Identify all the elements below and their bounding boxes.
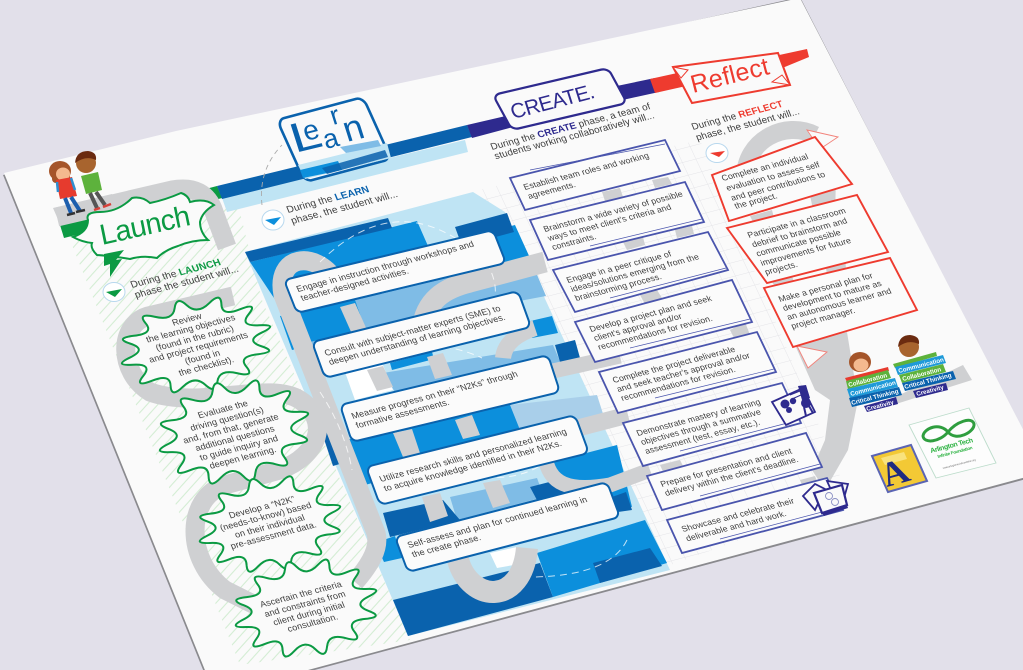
launch step: evaluate: deepen learning. [208,444,278,471]
create card 5: recommendations for revision. [619,364,737,403]
create card 3 [553,232,728,312]
logo: Arlington Tech [909,408,996,478]
launch step: ascertain: client during initial [271,600,346,627]
create card 3: brainstorming process. [573,272,663,303]
create card 6: Demonstrate mastery of learning [635,397,762,438]
phase timeline band [60,49,809,238]
reflect intro text: During the [690,110,741,133]
launch step: develop: pre-assessment data. [229,520,318,551]
icon: students with skill stacks [845,335,956,413]
create grid background [478,140,850,566]
reflect card 1 [712,137,852,221]
create card 5 [599,332,776,413]
create intro text: CREATE phase, a team of [536,101,652,141]
reflect card 2: projects. [763,259,799,277]
skill bar: critical thinking: Critical Thinking [850,388,900,407]
reflect card 1: evaluation to assess self [724,160,822,193]
launch heading badge [73,193,214,277]
learn heading badge: r [326,100,344,131]
learn card 1: Engage in instruction through workshops and [295,239,476,294]
learn card 5: the create phase. [410,533,483,559]
create card 6: objectives through a summative [639,407,763,447]
learn card 3 [340,355,560,442]
create card 4: recommendations for revision. [596,313,714,352]
launch step: evaluate: Evaluate the [196,398,249,420]
skill bar: creativity: Creativity [865,399,895,413]
learn card 1 [284,230,506,313]
launch step: review [104,283,288,407]
launch intro text: LAUNCH [177,257,223,278]
skill bar: critical thinking 2: Critical Thinking [903,372,953,391]
launch intro text: phase the student will... [133,264,241,301]
learn card 5: Self-assess and plan for continued learning in [406,494,589,550]
learn card 2: deepen understanding of learning objectives. [327,312,507,367]
create card 7: delivery within the client's deadline. [663,454,800,498]
create card 4: client's approval and/or [592,311,683,343]
create heading badge: CREATE. [508,80,598,124]
reflect card 2: improvements for future [759,235,853,268]
create card 2 [530,182,704,260]
launch step: ascertain: Ascertain the criteria [258,579,343,609]
learn card 2: Consult with subject-matter experts (SME) to [323,303,502,358]
learn card 1: teacher-designed activities. [299,266,410,303]
create card 1: agreements. [526,180,577,201]
create card 5: and seek teacher's approval and/or [615,350,752,394]
create card 6 [623,383,801,466]
launch heading badge: Launch [97,200,193,252]
launch step: review: (found in the rubric) [154,323,235,353]
icon: photos [803,481,848,516]
launch step: evaluate: and, from that, generate [181,412,280,445]
reflect card 3: development to mature as [781,278,883,313]
learn card 4: to acquire knowledge identified in their N2Ks. [382,438,563,493]
icon: certificate [772,385,815,425]
launch step: review: the learning objectives [144,312,237,345]
launch hatch background [70,205,410,665]
skill bar: communication: Communication [849,379,897,398]
panel: learn mosaic background [245,192,670,636]
launch step: develop: Develop a “N2K” [227,494,297,520]
create card 1 [510,140,680,210]
skill bar: collaboration 2: Collaboration [901,366,942,383]
reflect card 2 [727,195,888,283]
create card 2: constraints. [550,231,598,252]
skill bar: communication 2: Communication [897,356,945,375]
logo: school A: A [874,451,916,494]
launch step: evaluate [142,365,326,499]
logo: school A [872,445,927,494]
launch step: evaluate: additional questions [194,423,276,453]
learn card 5 [395,482,620,572]
reflect heading badge [673,52,790,103]
reflect card 2: Participate in a classroom [746,206,847,240]
launch step: evaluate: driving question(s) [189,405,265,433]
create card 3: Engage in a peer critique of [565,249,673,285]
learn card 4: Utilize research skills and personalized learning [378,427,568,484]
skill bar: creativity 2: Creativity [915,384,945,398]
dashed flow arcs [261,145,627,577]
icon: students at launch [49,151,118,224]
reflect intro text: phase, the student will... [694,107,801,143]
icon: launch arrow circle [103,282,125,302]
learn heading badge: e [298,113,323,147]
create card 7 [647,433,822,510]
create card 2: Brainstorm a wide variety of possible [542,189,685,234]
create heading badge [493,68,627,130]
launch step: ascertain: consultation. [286,612,340,634]
reflect card 3: an autonomous learner and [785,286,893,322]
launch step: ascertain: and constraints from [263,589,347,619]
learn heading badge: n [337,106,369,150]
create card 8: Showcase and celebrate their [680,496,796,534]
create card 8: deliverable and hard work. [684,508,788,543]
reflect card 1: Complete an individual [720,151,810,183]
icon: reflect arrow circle [706,144,728,162]
reflect card 3: Make a personal plan for [777,271,874,304]
create card 6: assessment (test, essay, etc.). [643,417,762,456]
learn card 2 [312,291,531,378]
create card 3: ideas/solutions emerging from the [569,252,701,294]
learn card 4 [366,415,589,505]
launch step: ascertain [218,545,394,670]
reflect card 3 [764,258,917,347]
icon: learn arrow circle [262,210,284,230]
create card 1: Establish team roles and working [522,150,651,192]
learn heading badge [277,97,391,182]
reflect card 1: the project. [733,191,779,211]
reflect card 2: debrief to brainstorm and [750,216,849,249]
learn card 3: Measure progress on their “N2Ks” through [350,369,519,421]
learn card 3: formative assessments. [354,397,451,430]
create card 2: ways to meet client's criteria and [545,202,673,243]
reflect heading badge: Reflect [688,52,772,99]
create intro text: During the [489,130,540,153]
launch step: review: the checklist). [177,354,235,378]
launch step: develop [182,462,358,586]
reflect card 1: and peer contributions to [729,169,827,203]
grey roads [57,130,972,605]
learn heading badge: L [284,110,327,162]
learn intro text: phase, the student will... [290,189,400,227]
launch step: review: (found in [183,348,222,366]
logo: Arlington Tech: Infinite Foundation [937,445,973,459]
create card 4: Develop a project plan and seek [588,293,714,334]
launch step: develop: on their individual [233,512,306,540]
create card 5: Complete the project deliverable [611,344,737,385]
reflect intro text: REFLECT [737,99,785,121]
reflect card 2: communicate possible [754,227,843,258]
logo: Arlington Tech: www.arlingtontechfoundation.org [942,458,977,470]
skill bar: collaboration: Collaboration [847,372,888,389]
create card 4 [575,280,752,362]
launch step: review: and project requirements [147,330,250,365]
learn heading badge: a [319,123,342,155]
launch step: evaluate: to guide inquiry and [198,433,280,463]
launch intro text: During the [129,268,181,291]
launch step: develop: (needs-to-know) based [218,500,313,533]
logo: Arlington Tech: Arlington Tech [929,437,974,455]
create intro text: students working collaboratively will... [493,111,656,162]
learn intro text: LEARN [333,184,371,203]
reflect corner flags [797,130,838,368]
create card 8 [667,478,843,553]
launch step: review: Review [170,311,204,328]
create card 7: Prepare for presentation and client [659,446,794,489]
learn intro text: During the [285,193,337,216]
reflect card 3: project manager. [789,305,857,331]
